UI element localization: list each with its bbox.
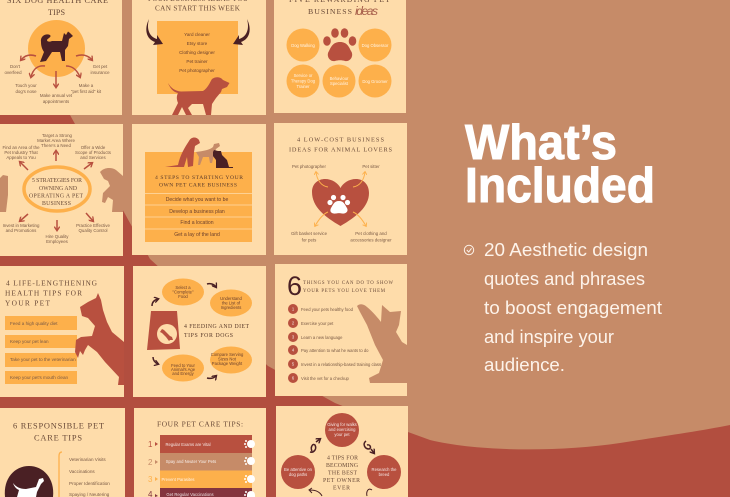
panel: five rewarding pet business ideas: ideas xyxy=(355,4,378,18)
list xyxy=(69,457,110,497)
circle labels xyxy=(291,43,389,89)
list: Develop a business plan xyxy=(169,209,225,215)
labels: Make a xyxy=(79,83,94,88)
ellipse labels: Understand xyxy=(220,296,242,301)
description text: to boost engagement xyxy=(484,298,662,318)
heading: BECOMING xyxy=(326,463,358,469)
panel: four pet care tips xyxy=(134,408,266,497)
circle labels: Giving for walks xyxy=(327,422,357,427)
ellipse labels: and Energy xyxy=(172,371,195,376)
list: Clothing designer xyxy=(179,50,215,55)
heading xyxy=(29,178,83,207)
labels: Find an Area of the xyxy=(2,145,40,150)
icons: white paws xyxy=(244,440,255,497)
numbered list: Exercise your pet xyxy=(301,321,334,326)
numbers: 2 xyxy=(148,458,153,467)
labels xyxy=(291,164,392,242)
icon: white paw xyxy=(327,195,350,214)
bars xyxy=(160,435,252,453)
markers xyxy=(155,442,158,497)
icon: tan cat xyxy=(357,304,407,383)
numbers: 3 xyxy=(148,475,153,484)
big numeral: 6 xyxy=(287,271,302,301)
circle labels xyxy=(284,422,397,477)
list: Vaccinations xyxy=(69,469,95,474)
labels: Market Area Where xyxy=(37,138,75,143)
panel: life-lengthening health tips xyxy=(0,266,124,397)
panel: feeding and diet tips xyxy=(133,266,266,397)
circle labels: Research the xyxy=(372,467,397,472)
labels xyxy=(4,64,110,104)
bar labels xyxy=(161,442,216,497)
labels: Pet sitter xyxy=(362,164,380,169)
icon: check xyxy=(464,245,474,255)
description text: and inspire your xyxy=(484,327,614,347)
numbered list xyxy=(288,304,381,383)
heading: what's included: Included xyxy=(465,159,655,213)
circle labels: Be attentive on xyxy=(284,467,313,472)
heading: 4 LOW-COST BUSINESS xyxy=(297,136,384,144)
numbered list: 1 xyxy=(292,306,295,312)
list: Get a lay of the land xyxy=(174,232,220,238)
icon: heart xyxy=(312,179,369,226)
icon: white dog xyxy=(13,478,44,497)
bar labels: Prevent Parasites xyxy=(161,477,195,482)
labels: appointments xyxy=(43,99,70,104)
heading: 6 RESPONSIBLE PET xyxy=(13,422,104,430)
icon: husky dog xyxy=(40,32,73,62)
labels: Pet photographer xyxy=(292,164,327,169)
arrows xyxy=(20,151,93,230)
panel: responsible pet care tips: CARE TIPS xyxy=(34,434,82,442)
panel: steps to starting pet care business xyxy=(132,124,266,255)
ellipse labels: Package Weight xyxy=(212,361,243,366)
heading xyxy=(5,278,98,308)
arrows xyxy=(146,19,250,45)
numbered list: 5 xyxy=(292,362,295,366)
ellipse labels: Food xyxy=(178,294,188,299)
ellipse labels: Select a xyxy=(175,285,191,290)
labels: overfeed xyxy=(4,70,22,75)
orange block xyxy=(145,152,252,242)
panel: strategies for owning a pet business xyxy=(0,124,123,256)
labels: for pets xyxy=(302,238,317,242)
panel: responsible pet care tips xyxy=(0,408,125,497)
circle labels: Service or xyxy=(294,73,313,78)
numbered list: 2 xyxy=(292,320,295,326)
numbers: 1 xyxy=(148,440,153,449)
ellipse labels xyxy=(171,285,244,376)
circle labels: Dog Groomer xyxy=(362,79,388,84)
heading: 5 STRATEGIES FOR xyxy=(32,178,82,184)
circle labels: Dog Walking xyxy=(291,43,315,48)
heading: 4 STEPS TO STARTING YOUR xyxy=(155,175,243,181)
icon: scottie dog xyxy=(75,293,124,385)
heading: THINGS YOU CAN DO TO SHOW xyxy=(303,281,393,286)
heading: YOUR PET xyxy=(5,298,50,308)
list: Pet photographer xyxy=(179,68,215,73)
heading xyxy=(323,456,360,492)
heading: OPERATING A PET xyxy=(29,194,83,200)
panel: steps to starting pet care business: OWN PET CARE BUSINESS xyxy=(159,182,237,188)
labels: "pet first aid" kit xyxy=(71,89,102,94)
panel: five rewarding pet business ideas xyxy=(274,0,406,113)
list: Veterinarian Visits xyxy=(69,457,106,462)
orange block xyxy=(157,21,238,94)
panel: low-cost business ideas xyxy=(274,123,407,255)
labels: accessories designer xyxy=(350,238,392,242)
numbered list: Visit the vet for a checkup xyxy=(301,376,350,381)
heading: BUSINESS xyxy=(42,201,71,207)
labels: Don't xyxy=(10,64,21,69)
bar labels: Take your pet to the veterinarian xyxy=(10,357,76,362)
background red wave xyxy=(0,115,730,497)
circle labels: breed xyxy=(379,472,390,477)
panel: feeding and diet tips: TIPS FOR DOGS xyxy=(184,333,233,339)
heading: THE BEST xyxy=(328,470,357,476)
heading: 4 LIFE-LENGTHENING xyxy=(6,278,98,288)
ellipse labels: Compare Serving xyxy=(211,352,244,357)
bars xyxy=(5,316,77,384)
list: Find a location xyxy=(180,220,214,226)
numbered list: Invest in a relationship-based training class xyxy=(301,362,381,367)
bar labels: Feed a high quality diet xyxy=(10,321,58,326)
circle labels: Behaviour xyxy=(330,76,349,81)
circle labels: dog paths xyxy=(289,472,307,477)
numbered list: 4 xyxy=(292,348,295,352)
list: Etsy store xyxy=(187,41,208,46)
circle labels: Dog Obsessor xyxy=(362,43,389,48)
heading: 4 FEEDING AND DIET xyxy=(184,324,249,330)
numbered list: Pay attention to what he wants to do xyxy=(301,348,369,353)
labels: Hire Quality xyxy=(46,234,69,239)
circle labels: your pet xyxy=(334,432,350,437)
labels: Pet clothing and xyxy=(355,231,387,236)
labels: Get pet xyxy=(93,64,108,69)
labels: Gift basket service xyxy=(291,231,328,236)
ellipse labels: "Complete" xyxy=(173,290,194,294)
labels: Target a Strong xyxy=(42,133,73,138)
list: Yard cleaner xyxy=(184,32,210,37)
bracket xyxy=(59,452,62,497)
labels: Scope of Products xyxy=(75,150,112,155)
separators xyxy=(145,194,252,229)
numbered list: 6 xyxy=(292,376,295,380)
panel: five rewarding pet business ideas: BUSINESS xyxy=(308,7,352,16)
icon: tan dog xyxy=(100,168,123,212)
ellipse labels: the List of xyxy=(222,300,241,306)
circle labels: Trainer xyxy=(296,84,310,89)
heading: FOUR PET CARE TIPS: xyxy=(157,420,243,428)
list: Proper Identification xyxy=(69,481,110,486)
heading: what's included xyxy=(465,116,655,213)
circles xyxy=(286,28,392,98)
labels: Practice Effective xyxy=(76,223,110,228)
heading: what's included: What’s xyxy=(465,116,617,170)
description text: audience. xyxy=(484,355,565,375)
arrows xyxy=(152,284,216,378)
labels: and Services xyxy=(80,155,106,160)
badge xyxy=(5,466,53,497)
ellipse labels: Animal's Age xyxy=(171,367,196,372)
labels: Quality Control xyxy=(78,228,108,233)
circle labels: and exercising xyxy=(328,427,356,432)
labels: Make annual vet xyxy=(40,93,73,98)
list: Decide what you want to be xyxy=(166,197,228,203)
labels: Invest in Marketing xyxy=(3,223,40,228)
heading: 4 TIPS FOR xyxy=(327,456,358,462)
circle labels: Therapy Dog xyxy=(291,78,316,84)
bar labels: Keep your pet's mouth clean xyxy=(10,375,69,380)
panel: six things to show love: YOUR PETS YOU LOVE THEM xyxy=(303,289,386,294)
ellipses xyxy=(162,278,252,382)
icon: dog food bag xyxy=(147,311,180,350)
description text xyxy=(484,240,662,375)
heading: HEALTH TIPS FOR xyxy=(5,288,82,298)
labels: Pet Industry That xyxy=(4,150,38,155)
arrows xyxy=(21,55,92,87)
labels: Offer a Wide xyxy=(81,145,106,150)
labels: Employees xyxy=(46,239,69,244)
circle labels: Specialist xyxy=(330,81,349,86)
labels: Touch your xyxy=(15,83,37,88)
bar labels xyxy=(10,321,76,380)
labels: There's a Need xyxy=(41,143,71,148)
panel: business ideas this week: CAN START THIS WEEK xyxy=(155,4,241,12)
numbered list: Feed your pets healthy food xyxy=(301,307,354,312)
panel: becoming the best pet owner xyxy=(276,406,408,497)
panel: six dog health care tips: TIPS xyxy=(48,8,65,17)
numbered list: 3 xyxy=(292,334,295,340)
heading: OWNING AND xyxy=(39,186,77,192)
description text: quotes and phrases xyxy=(484,269,645,289)
heading: PET OWNER xyxy=(323,478,360,484)
circles xyxy=(281,413,401,489)
bar labels: Keep your pet lean xyxy=(10,339,49,344)
circle xyxy=(28,20,85,77)
ellipse labels: Feed to Your xyxy=(171,363,195,368)
numbers xyxy=(148,440,153,497)
bar labels: Get Regular Vaccinations xyxy=(166,492,214,497)
ellipse labels: Ingredients xyxy=(221,305,241,310)
panel: low-cost business ideas: IDEAS FOR ANIMAL LOVERS xyxy=(289,146,392,154)
icon: three pets xyxy=(165,137,233,168)
panel: business ideas this week xyxy=(132,0,266,115)
icon: red dog xyxy=(168,77,230,115)
list: Pet trainer xyxy=(186,59,208,64)
icon: tan cat xyxy=(0,175,8,212)
labels: dog's nose xyxy=(15,89,37,94)
ring xyxy=(24,167,90,211)
labels: Appeals to You xyxy=(6,155,36,160)
ellipse labels: Sizes Not xyxy=(218,356,237,362)
description text: 20 Aesthetic design xyxy=(484,240,648,260)
panel: six dog health care tips xyxy=(0,0,122,115)
list xyxy=(179,32,215,73)
icon: paw xyxy=(323,28,356,61)
bar labels: Regular Exams are Vital xyxy=(165,442,211,447)
list: Spaying / Neutering xyxy=(69,492,110,497)
bar labels: Spay and Neuter Your Pets xyxy=(166,459,216,464)
arrows xyxy=(315,172,366,226)
labels: and Promotions xyxy=(6,228,37,233)
arrows xyxy=(309,439,374,496)
numbered list: Learn a new language xyxy=(301,335,343,340)
panel: six things to show love xyxy=(275,264,407,396)
labels xyxy=(2,133,112,244)
labels: insurance xyxy=(90,70,110,75)
list xyxy=(166,197,228,238)
heading: EVER xyxy=(333,486,350,492)
